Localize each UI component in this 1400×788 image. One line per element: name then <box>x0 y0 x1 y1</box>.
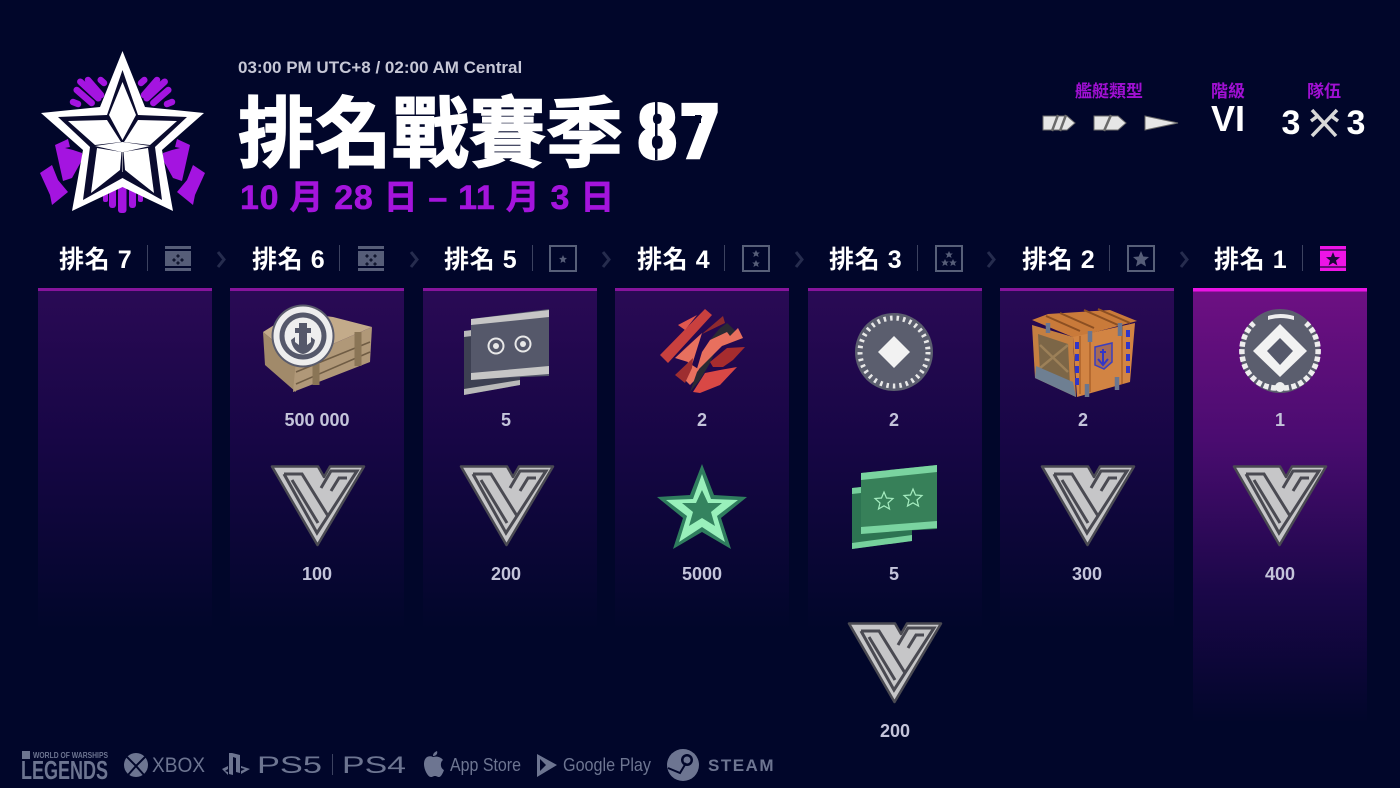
title: 87 <box>636 90 721 175</box>
logo: App Store <box>424 751 521 777</box>
rank 6 header: 排名 6 <box>252 246 325 274</box>
battle info: team size: 3 <box>1347 104 1365 142</box>
value: 5 <box>889 564 899 584</box>
icon: green star <box>657 464 747 549</box>
panel: rank 3 <box>808 288 982 630</box>
value: 200 <box>491 564 521 584</box>
value: 5 <box>501 410 511 430</box>
date range: 10 月 28 日 – 11 月 3 日 <box>240 179 615 217</box>
panel: rank 1 <box>1193 288 1367 723</box>
panel: rank 7 <box>38 288 212 630</box>
icon: V token <box>272 466 364 545</box>
value: 5000 <box>682 564 722 584</box>
icon: destroyer <box>1043 115 1075 131</box>
logo: Steam: STEAM <box>708 756 775 775</box>
logo: World of Warships Legends: LEGENDS <box>21 755 108 785</box>
logo: ranked star emblem <box>40 51 205 213</box>
logo: Google Play: Google Play <box>563 755 651 775</box>
icon: V token <box>461 466 553 545</box>
icon: V token (rank 3 overflow) <box>849 624 941 702</box>
logo: PlayStation 5 and 4 <box>222 752 406 779</box>
logo: PlayStation 5 and 4: PS5 <box>257 752 322 779</box>
value: 2 <box>697 410 707 430</box>
value: 300 <box>1072 564 1102 584</box>
panel: rank 6 <box>230 288 404 630</box>
battle info: team size: 隊伍 <box>1307 82 1341 101</box>
rank 7 header: 排名 7 <box>59 246 132 274</box>
title: 排名戰賽季 <box>238 92 623 178</box>
battle info: tier: 階級 <box>1211 81 1245 101</box>
icon: red camouflage <box>660 309 745 393</box>
logo: Steam <box>667 749 775 781</box>
rank 2 header <box>1022 245 1187 274</box>
icon: grey flag <box>464 309 549 395</box>
icon: V token <box>1042 466 1134 545</box>
icon: diamond medal <box>855 313 933 391</box>
icon: wooden crate with credits <box>263 304 372 392</box>
value: 2 <box>1078 410 1088 430</box>
battle info: ship types <box>1043 82 1178 131</box>
value: 500 000 <box>284 410 350 430</box>
rank 4 header <box>637 245 802 274</box>
icon: battleship <box>1145 116 1178 130</box>
rank 5 header <box>444 245 609 274</box>
battle info: team size: 3 <box>1282 104 1300 142</box>
value: 1 <box>1275 410 1285 430</box>
logo: Xbox <box>124 753 205 777</box>
logo: Xbox: XBOX <box>152 754 205 777</box>
battle info: ship types: 艦艇類型 <box>1075 82 1143 101</box>
icon: cruiser <box>1094 115 1126 131</box>
rank 1 header: 排名 1 <box>1214 246 1287 274</box>
logo: Google Play <box>537 754 651 777</box>
panel: rank 4 <box>615 288 789 630</box>
rank 3 header <box>829 245 994 274</box>
rank 6 header <box>252 245 417 274</box>
rank 5 header: 排名 5 <box>444 246 517 274</box>
battle info: tier: VI <box>1211 98 1245 139</box>
time line: 03:00 PM UTC+8 / 02:00 AM Central <box>238 58 522 77</box>
icon: laurel diamond medal <box>1240 309 1320 393</box>
value: 400 <box>1265 564 1295 584</box>
logo: World of Warships Legends: WORLD OF WARSHIPS <box>33 751 109 760</box>
rank 7 header <box>59 245 224 274</box>
icon: green flag <box>852 465 937 549</box>
value: 100 <box>302 564 332 584</box>
logo: World of Warships Legends <box>21 751 109 785</box>
rank 2 header: 排名 2 <box>1022 246 1095 274</box>
panel: rank 2 <box>1000 288 1174 630</box>
icon: orange crate <box>1032 309 1137 397</box>
icon: crossed swords <box>1311 110 1338 136</box>
battle info: team size <box>1282 82 1365 142</box>
footer: platform logos <box>21 749 775 785</box>
rank 3 header: 排名 3 <box>829 246 902 274</box>
rank 1 header <box>1214 245 1346 274</box>
rank 4 header: 排名 4 <box>637 246 710 274</box>
icon: V token <box>1234 466 1326 545</box>
value: 2 <box>889 410 899 430</box>
panel: rank 5 <box>423 288 597 630</box>
logo: PlayStation 5 and 4: PS4 <box>342 752 406 779</box>
logo: App Store: App Store <box>450 755 521 775</box>
value: rank 3 overflow: 200 <box>880 721 910 741</box>
